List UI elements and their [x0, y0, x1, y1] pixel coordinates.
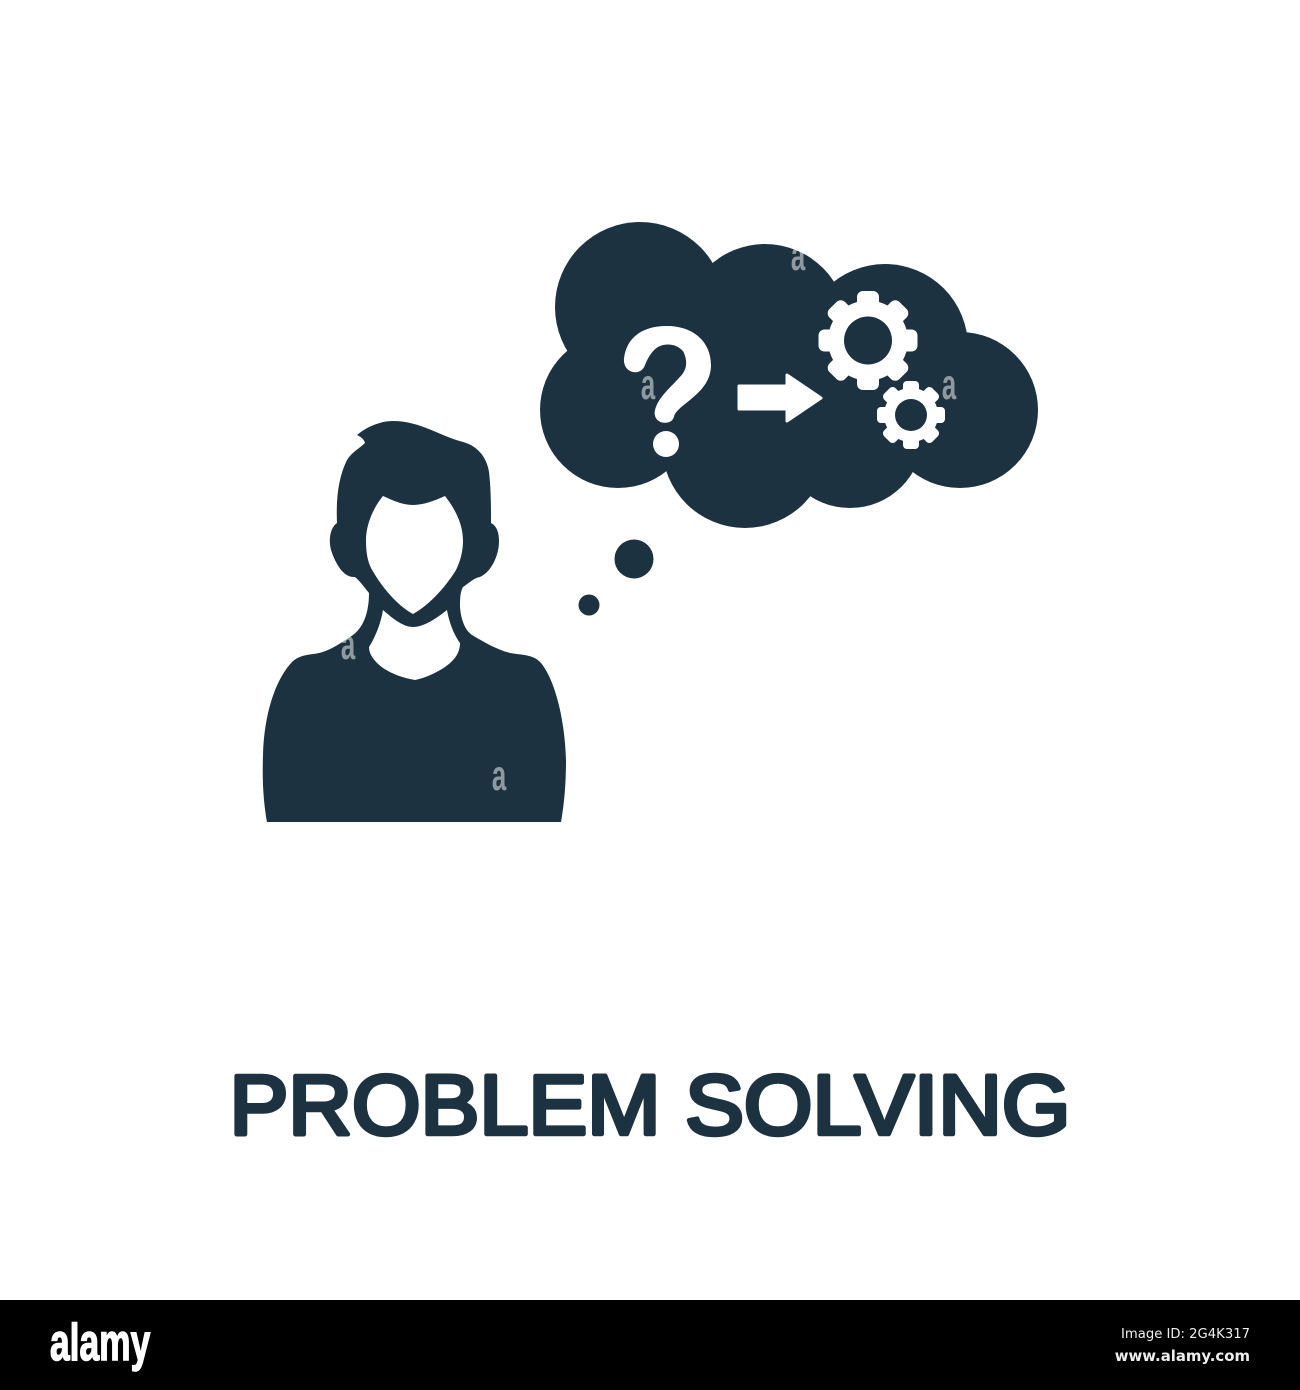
- icon: arrow: [739, 375, 821, 421]
- title: PROBLEM SOLVING: [230, 1058, 1070, 1152]
- footer bar: [0, 1300, 1300, 1390]
- watermark glyphs: a: [791, 231, 805, 280]
- icon: question mark: [624, 326, 711, 457]
- face cutout: [366, 496, 463, 614]
- watermark glyphs: a: [942, 360, 956, 409]
- watermark glyphs: a: [641, 360, 655, 409]
- image id: Image ID: 2G4K317: [1121, 1327, 1250, 1342]
- watermark glyphs: [341, 231, 956, 800]
- icon: small gear: [877, 381, 945, 449]
- icon: person silhouette: [263, 421, 566, 822]
- icon: thought cloud: [540, 222, 1038, 528]
- icon: large gear: [818, 291, 918, 390]
- neck cutout: [369, 610, 460, 680]
- logo: alamy: alamy: [50, 1314, 150, 1372]
- watermark glyphs: a: [341, 620, 355, 669]
- icon: thought bubble dots: [578, 540, 654, 616]
- website: www.alamy.com: [1115, 1347, 1250, 1365]
- watermark glyphs: a: [492, 751, 506, 800]
